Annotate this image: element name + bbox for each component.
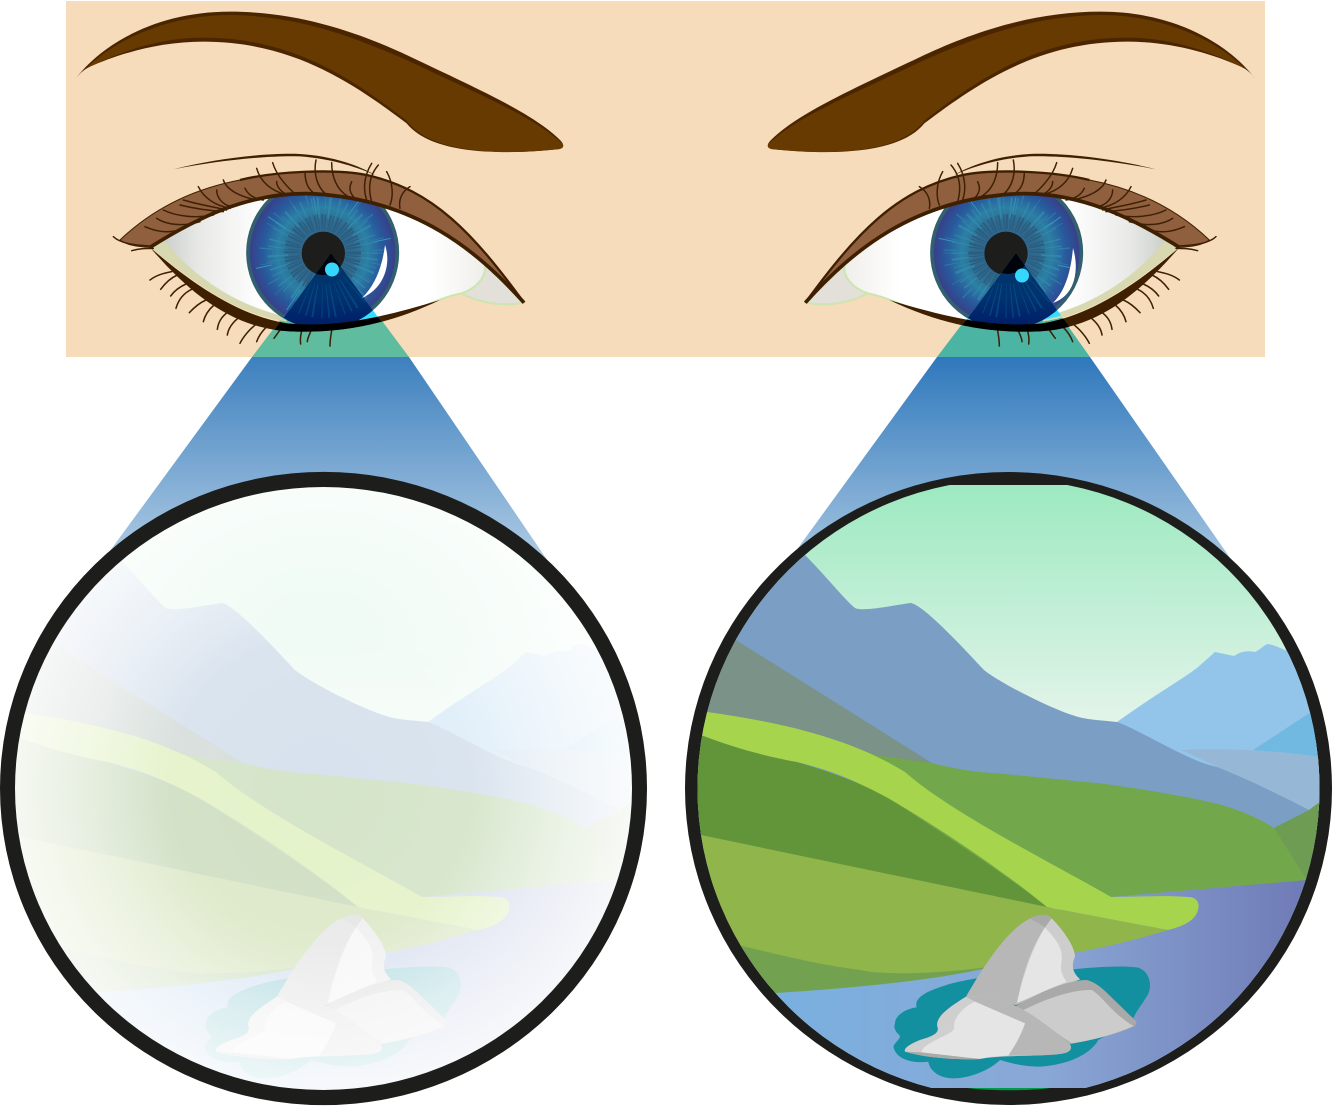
right beam teal band over skin — [937, 253, 1090, 357]
right eye — [805, 154, 1216, 346]
left light beam below the face — [96, 357, 554, 570]
left lens: blurry view — [0, 470, 651, 1106]
right eye highlight — [1053, 248, 1076, 303]
right eye beam entering the pupil — [962, 253, 1070, 332]
right eye cyan focus point — [1015, 268, 1029, 282]
left eye beam entering the pupil — [274, 253, 382, 332]
left eye highlight — [362, 245, 387, 298]
face skin panel — [66, 1, 1265, 357]
left eye cyan focus point — [325, 262, 339, 276]
right light beam below the face — [782, 357, 1242, 575]
left beam teal band over skin — [252, 253, 409, 357]
right lens: sharp view — [680, 472, 1332, 1105]
right eyebrow — [768, 12, 1255, 152]
left eye — [113, 154, 524, 346]
left eyebrow — [76, 12, 563, 152]
